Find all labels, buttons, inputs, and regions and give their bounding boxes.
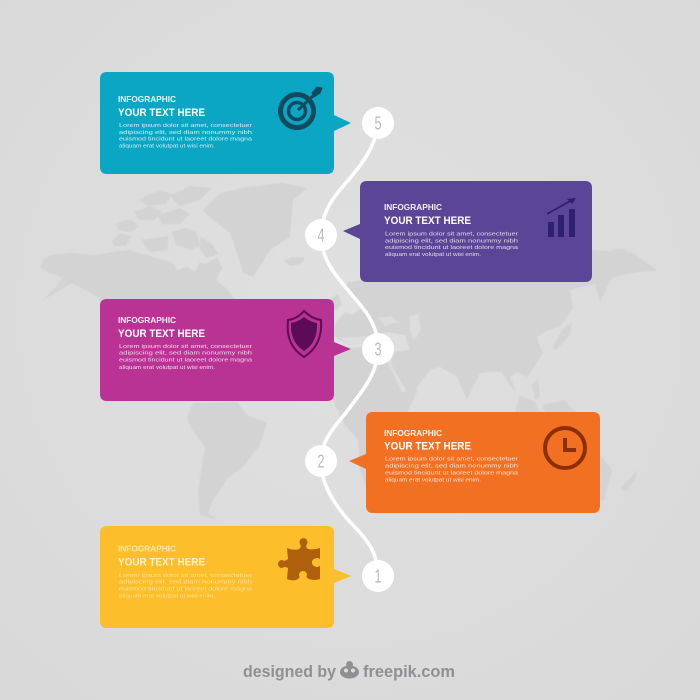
body text: step 4 bbox=[385, 232, 519, 258]
title: step 4: YOUR TEXT HERE bbox=[384, 215, 471, 227]
body text: step 5: euismod tincidunt ut laoreet dolore magna bbox=[119, 137, 253, 143]
footer domain: freepik.com bbox=[363, 662, 455, 681]
body text: step 2 bbox=[385, 457, 519, 483]
body text: step 3 bbox=[119, 344, 253, 371]
body text: step 3: adipiscing elit, sed diam nonummy nibh bbox=[119, 351, 252, 357]
panel: step 1 yellow bbox=[100, 526, 351, 628]
icon: target with arrow bbox=[280, 87, 322, 128]
heading: step 1: INFOGRAPHIC bbox=[118, 544, 176, 554]
footer: freepik credit: designed by bbox=[243, 662, 337, 681]
body text: step 1: aliquam erat volutpat ut wisi enim. bbox=[119, 593, 215, 599]
body text: step 3: Lorem ipsum dolor sit amet, consectetuer bbox=[119, 344, 252, 350]
body text: step 4: adipiscing elit, sed diam nonummy nibh bbox=[385, 238, 518, 244]
body text: step 3: euismod tincidunt ut laoreet dolore magna bbox=[119, 358, 253, 364]
step 2 marker bbox=[305, 445, 337, 477]
body text: step 1 bbox=[119, 573, 253, 599]
body text: step 4: Lorem ipsum dolor sit amet, consectetuer bbox=[385, 232, 518, 238]
winding timeline path bbox=[321, 123, 378, 576]
step 4 marker: 4 bbox=[318, 226, 324, 246]
icon: rising bar chart bbox=[547, 198, 576, 237]
world map bbox=[40, 183, 657, 520]
title: step 5: YOUR TEXT HERE bbox=[118, 107, 205, 119]
body text: step 4: aliquam erat volutpat ut wisi enim. bbox=[385, 252, 481, 258]
heading: step 2: INFOGRAPHIC bbox=[384, 428, 442, 438]
step 2 marker: 2 bbox=[318, 452, 324, 472]
heading: step 4: INFOGRAPHIC bbox=[384, 202, 442, 212]
icon: shield bbox=[288, 311, 321, 357]
step 5 marker bbox=[362, 107, 394, 139]
body text: step 4: euismod tincidunt ut laoreet dolore magna bbox=[385, 245, 519, 251]
step 3 marker: 3 bbox=[374, 340, 382, 360]
title: step 1: YOUR TEXT HERE bbox=[118, 556, 205, 568]
body text: step 5 bbox=[119, 123, 253, 150]
footer: freepik credit bbox=[243, 661, 455, 681]
body text: step 3: aliquam erat volutpat ut wisi enim. bbox=[119, 365, 215, 371]
heading: step 3: INFOGRAPHIC bbox=[118, 315, 176, 325]
body text: step 5: Lorem ipsum dolor sit amet, consectetuer bbox=[119, 123, 252, 129]
body text: step 2: euismod tincidunt ut laoreet dolore magna bbox=[385, 471, 519, 477]
icon: clock bbox=[545, 428, 585, 468]
body text: step 1: euismod tincidunt ut laoreet dolore magna bbox=[119, 586, 253, 592]
step 3 marker bbox=[362, 333, 394, 365]
title: step 3: YOUR TEXT HERE bbox=[118, 328, 205, 340]
body text: step 1: adipiscing elit, sed diam nonummy nibh bbox=[119, 580, 252, 586]
icon: puzzle piece bbox=[278, 538, 320, 580]
body text: step 5: aliquam erat volutpat ut wisi enim. bbox=[119, 144, 215, 150]
step 4 marker bbox=[305, 219, 337, 251]
step 1 marker: 1 bbox=[374, 566, 382, 586]
title: step 2: YOUR TEXT HERE bbox=[384, 440, 471, 452]
body text: step 2: aliquam erat volutpat ut wisi enim. bbox=[385, 477, 481, 483]
panel: step 5 teal bbox=[100, 72, 351, 174]
body text: step 5: adipiscing elit, sed diam nonummy nibh bbox=[119, 130, 252, 136]
step 5 marker: 5 bbox=[374, 114, 382, 134]
inland seas on map bbox=[340, 314, 421, 345]
panel: step 2 orange bbox=[349, 412, 600, 513]
body text: step 2: adipiscing elit, sed diam nonummy nibh bbox=[385, 464, 518, 470]
icon: freepik mascot bbox=[340, 661, 359, 678]
panel: step 4 purple bbox=[343, 181, 592, 282]
body text: step 2: Lorem ipsum dolor sit amet, consectetuer bbox=[385, 457, 518, 463]
step 1 marker bbox=[362, 560, 394, 592]
body text: step 1: Lorem ipsum dolor sit amet, consectetuer bbox=[119, 573, 252, 579]
panel: step 3 magenta bbox=[100, 299, 351, 401]
heading: step 5: INFOGRAPHIC bbox=[118, 94, 176, 104]
